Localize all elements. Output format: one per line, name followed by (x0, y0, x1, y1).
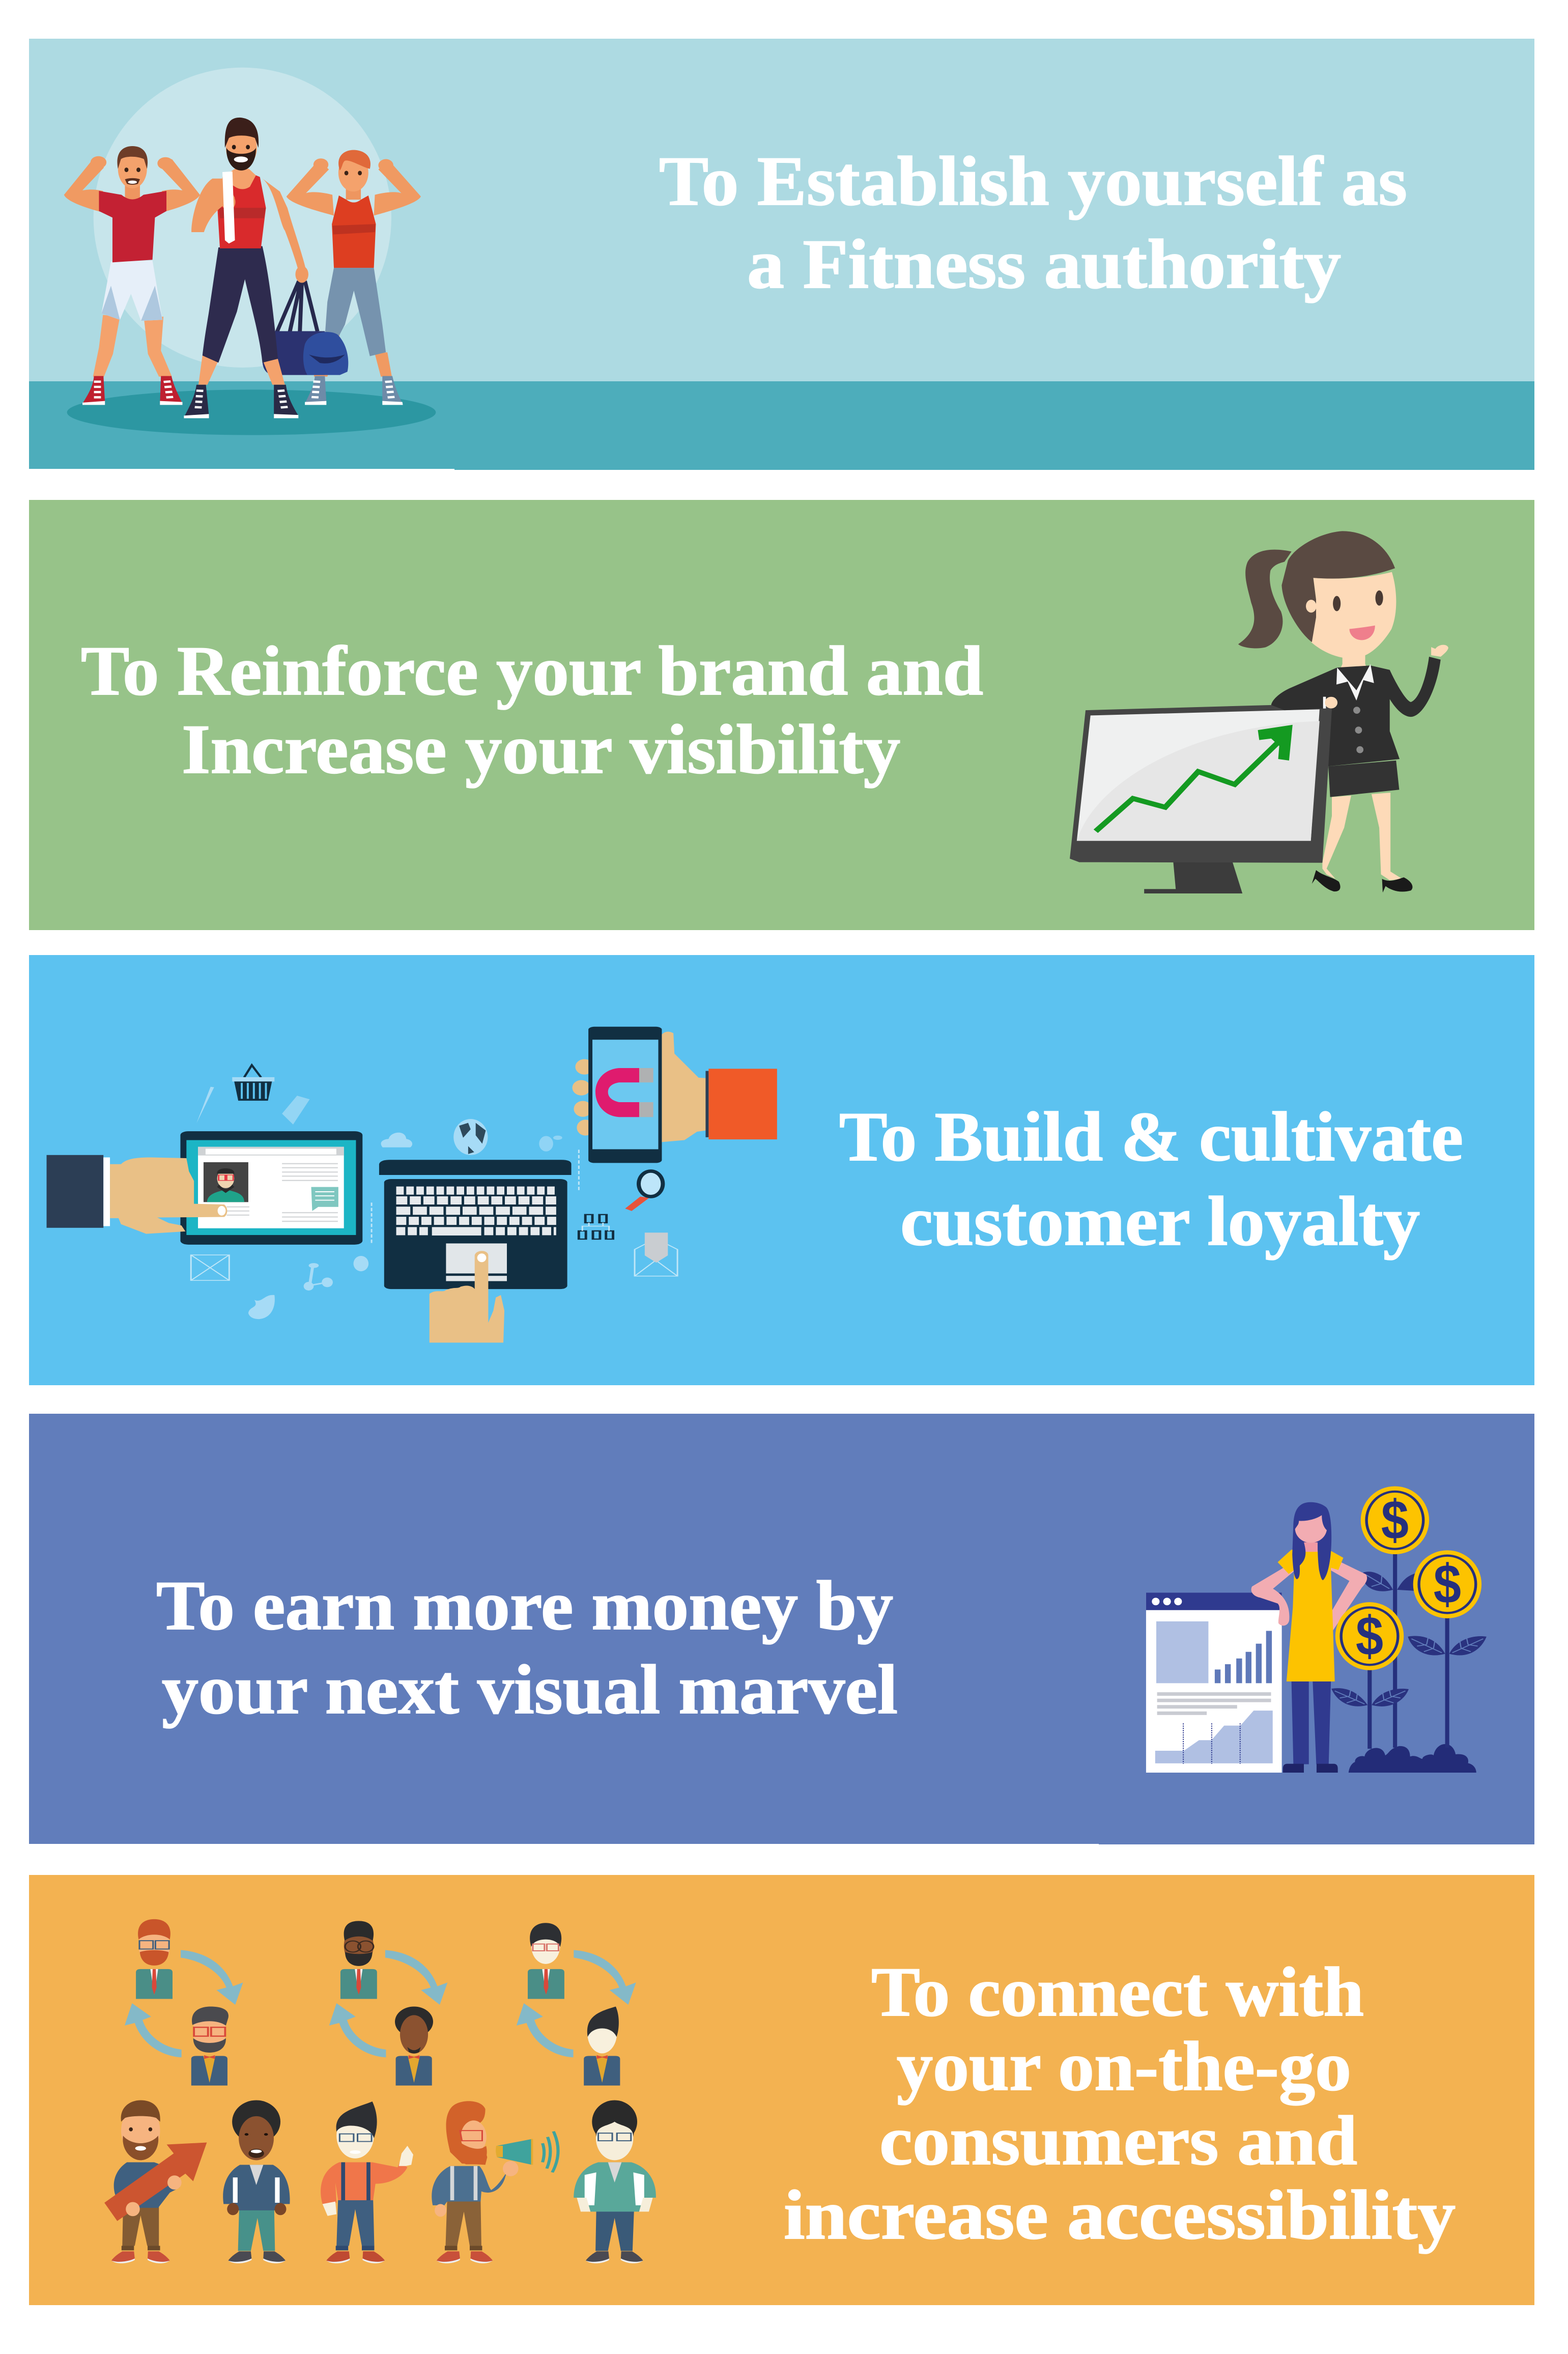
heading text: To Reinforce your brand and (81, 632, 983, 710)
woman in yellow dress (1251, 1502, 1367, 1773)
heading text (156, 1566, 898, 1728)
exchange group three (517, 1923, 636, 2086)
heading text: consumers and (879, 2101, 1357, 2179)
heading text: To Build & cultivate (839, 1098, 1463, 1175)
phone with magnet and hand (572, 1027, 777, 1163)
exchange group one (125, 1919, 243, 2086)
panel: earn more money (29, 1414, 1534, 1844)
heading text: your next visual marvel (162, 1650, 898, 1728)
tablet with hand (47, 1131, 362, 1245)
panel: customer loyalty (29, 955, 1534, 1385)
coin one (1361, 1486, 1429, 1554)
heading text: To earn more money by (156, 1566, 893, 1644)
heading text (659, 142, 1407, 303)
panel background (29, 39, 1534, 469)
heading text (81, 632, 983, 788)
money plants (1331, 1553, 1487, 1773)
analytics window (1146, 1593, 1282, 1773)
illustration: businesswoman with rising chart monitor (1070, 531, 1448, 893)
man with suspenders pointing (321, 2101, 413, 2263)
laptop with hand (379, 1160, 572, 1342)
woman (1238, 531, 1448, 892)
panel background (29, 500, 1534, 930)
panel background (29, 1875, 1534, 2305)
man with empty pockets (574, 2100, 656, 2263)
magnifying glass (625, 1169, 665, 1211)
monitor (1070, 704, 1332, 893)
heading text: To connect with (871, 1953, 1364, 2031)
illustration: woman, analytics window and money plants (1146, 1486, 1487, 1773)
heading text: increase accessibility (784, 2176, 1456, 2254)
panel: connect with consumers (29, 1875, 1534, 2305)
panel: brand and visibility (29, 500, 1534, 930)
gym bag (263, 281, 348, 375)
coin two (1413, 1550, 1481, 1618)
man in third position with orange tank (287, 150, 421, 405)
illustration: people exchanging and characters (104, 1919, 656, 2263)
coin three: $ (1356, 1606, 1383, 1667)
heading text (839, 1098, 1463, 1260)
illustration: three fitness people with bag (64, 68, 436, 435)
heading text (784, 1953, 1456, 2254)
org chart icon (579, 1215, 613, 1239)
man in red shirt (64, 146, 200, 405)
coin one: $ (1381, 1490, 1409, 1551)
coin three (1335, 1602, 1404, 1670)
pointing hand and cuff (47, 1155, 227, 1234)
coin two: $ (1434, 1554, 1461, 1615)
faint floating icons (186, 1087, 677, 1319)
floor band (29, 381, 1534, 470)
hand on monitor (1271, 696, 1337, 710)
man with afro (223, 2100, 290, 2263)
man with red arrow (104, 2100, 207, 2263)
shopping basket (232, 1065, 274, 1101)
heading text: a Fitness authority (747, 225, 1341, 303)
illustration: devices, hands and magnet (47, 1027, 777, 1342)
heading text: your on-the-go (897, 2027, 1351, 2105)
heading text: To Establish yourself as (659, 142, 1407, 220)
centre man with towel (184, 118, 308, 418)
rising green arrow (1096, 725, 1293, 831)
heading text: customer loyalty (900, 1182, 1420, 1260)
man with megaphone (432, 2101, 558, 2263)
globe (453, 1119, 488, 1155)
heading text: Increase your visibility (182, 710, 900, 788)
panel: fitness authority (29, 39, 1534, 470)
panel background (29, 955, 1534, 1385)
exchange group two (329, 1921, 447, 2086)
panel background (29, 1414, 1534, 1844)
